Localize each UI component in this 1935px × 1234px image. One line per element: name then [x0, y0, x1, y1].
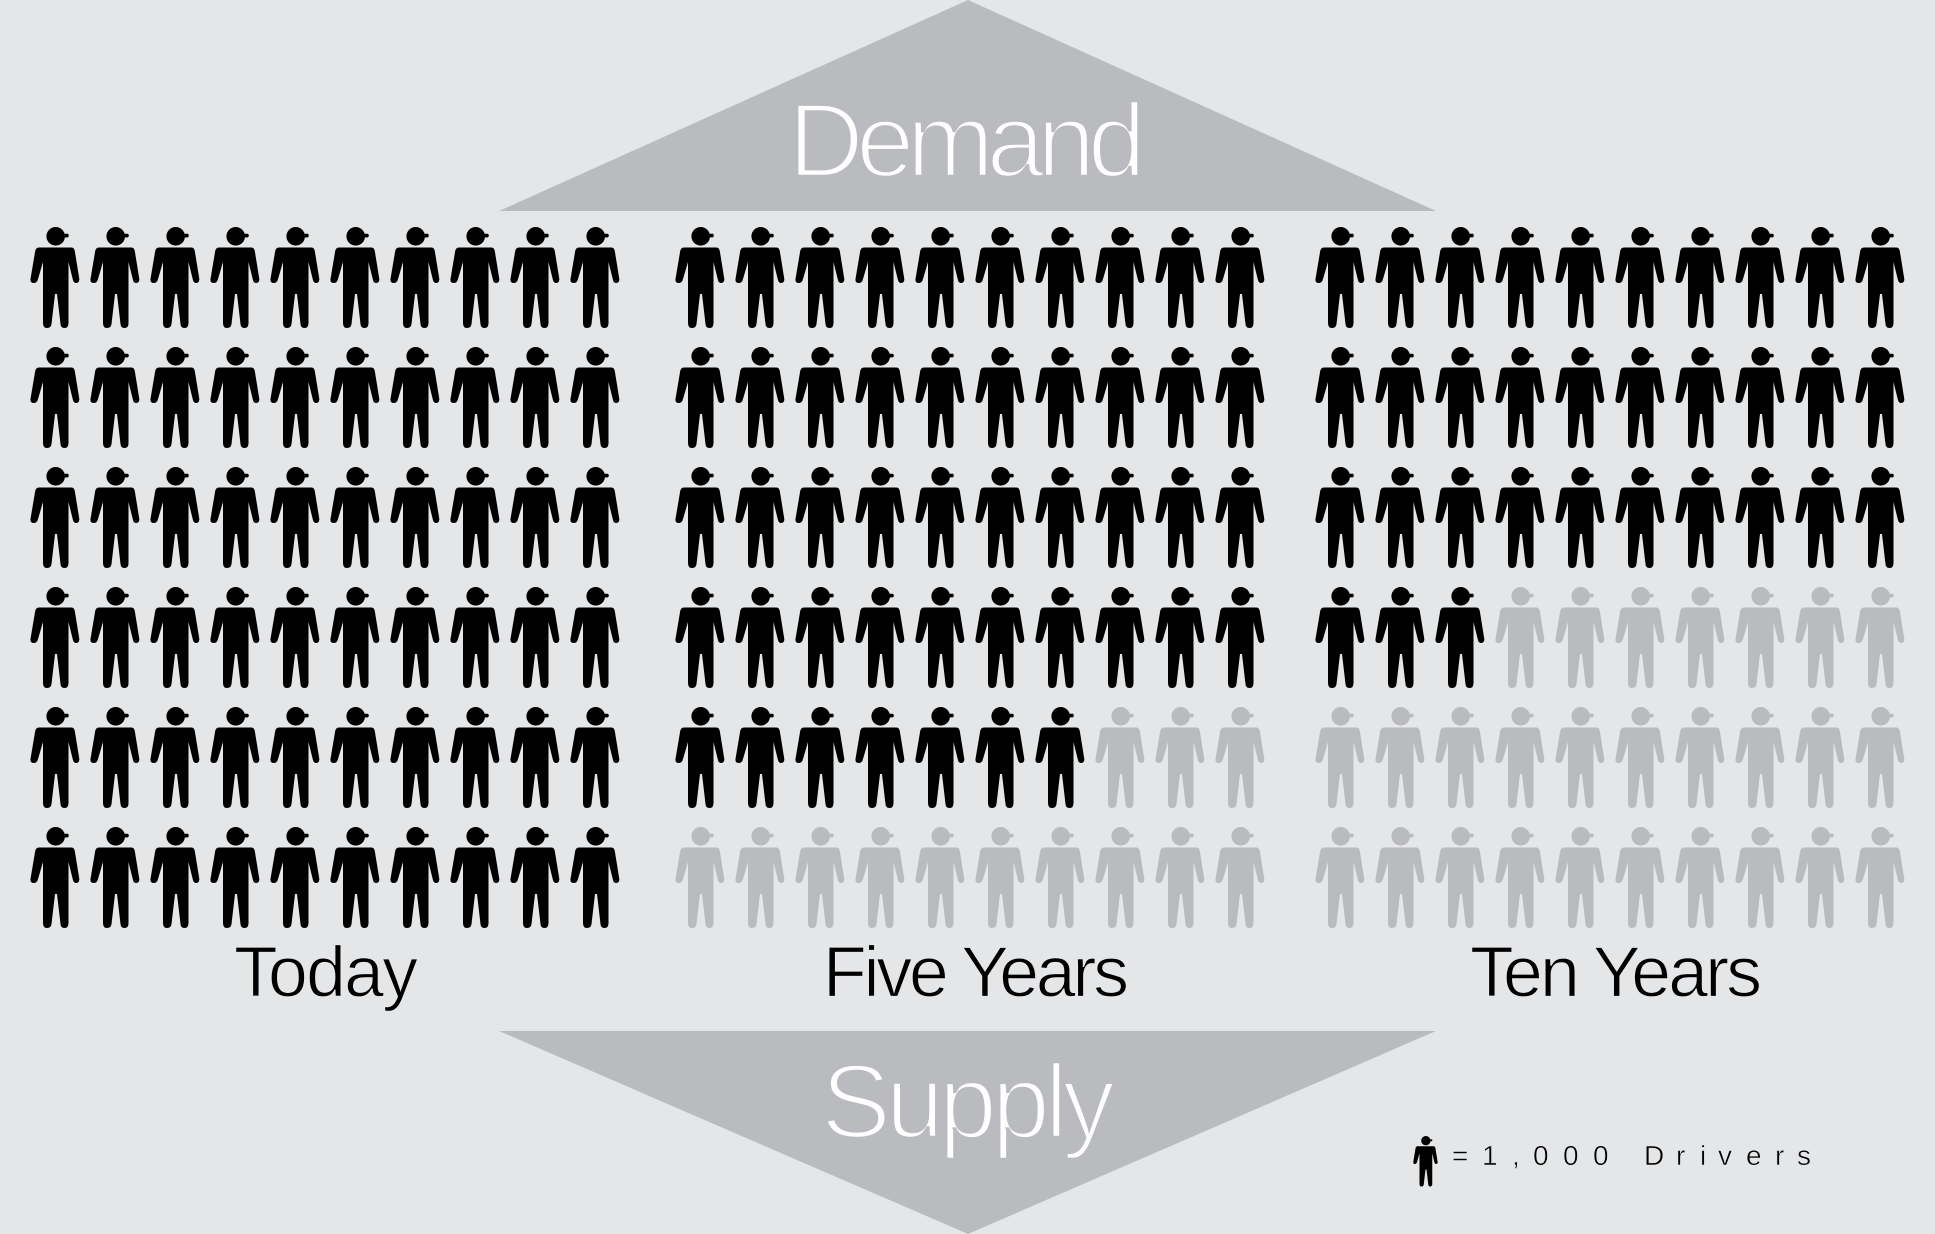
heading: Demand: Demand	[788, 83, 1146, 200]
icons: five years filled drivers (47)	[675, 227, 1264, 808]
panel: five years	[675, 227, 1264, 1013]
icons: today drivers (60)	[30, 227, 619, 928]
label: Today: Today	[234, 933, 418, 1013]
icon: driver	[1413, 1136, 1438, 1186]
panel: today	[30, 227, 619, 1013]
demand triangle with heading	[499, 0, 1436, 211]
legend text: =1,000 Drivers	[1452, 1140, 1811, 1171]
icons: ten years unfilled drivers (27)	[1315, 587, 1904, 928]
label: Five Years: Five Years	[823, 933, 1129, 1013]
supply triangle with heading	[499, 1031, 1436, 1234]
heading: Supply: Supply	[821, 1044, 1116, 1160]
label: Ten Years: Ten Years	[1470, 933, 1762, 1013]
icons: ten years filled drivers (33)	[1315, 227, 1904, 688]
demand triangle	[499, 0, 1436, 211]
icons: five years unfilled drivers (13)	[675, 707, 1264, 928]
supply triangle	[499, 1031, 1436, 1234]
legend	[1413, 1136, 1811, 1186]
panel: ten years	[1315, 227, 1904, 1013]
